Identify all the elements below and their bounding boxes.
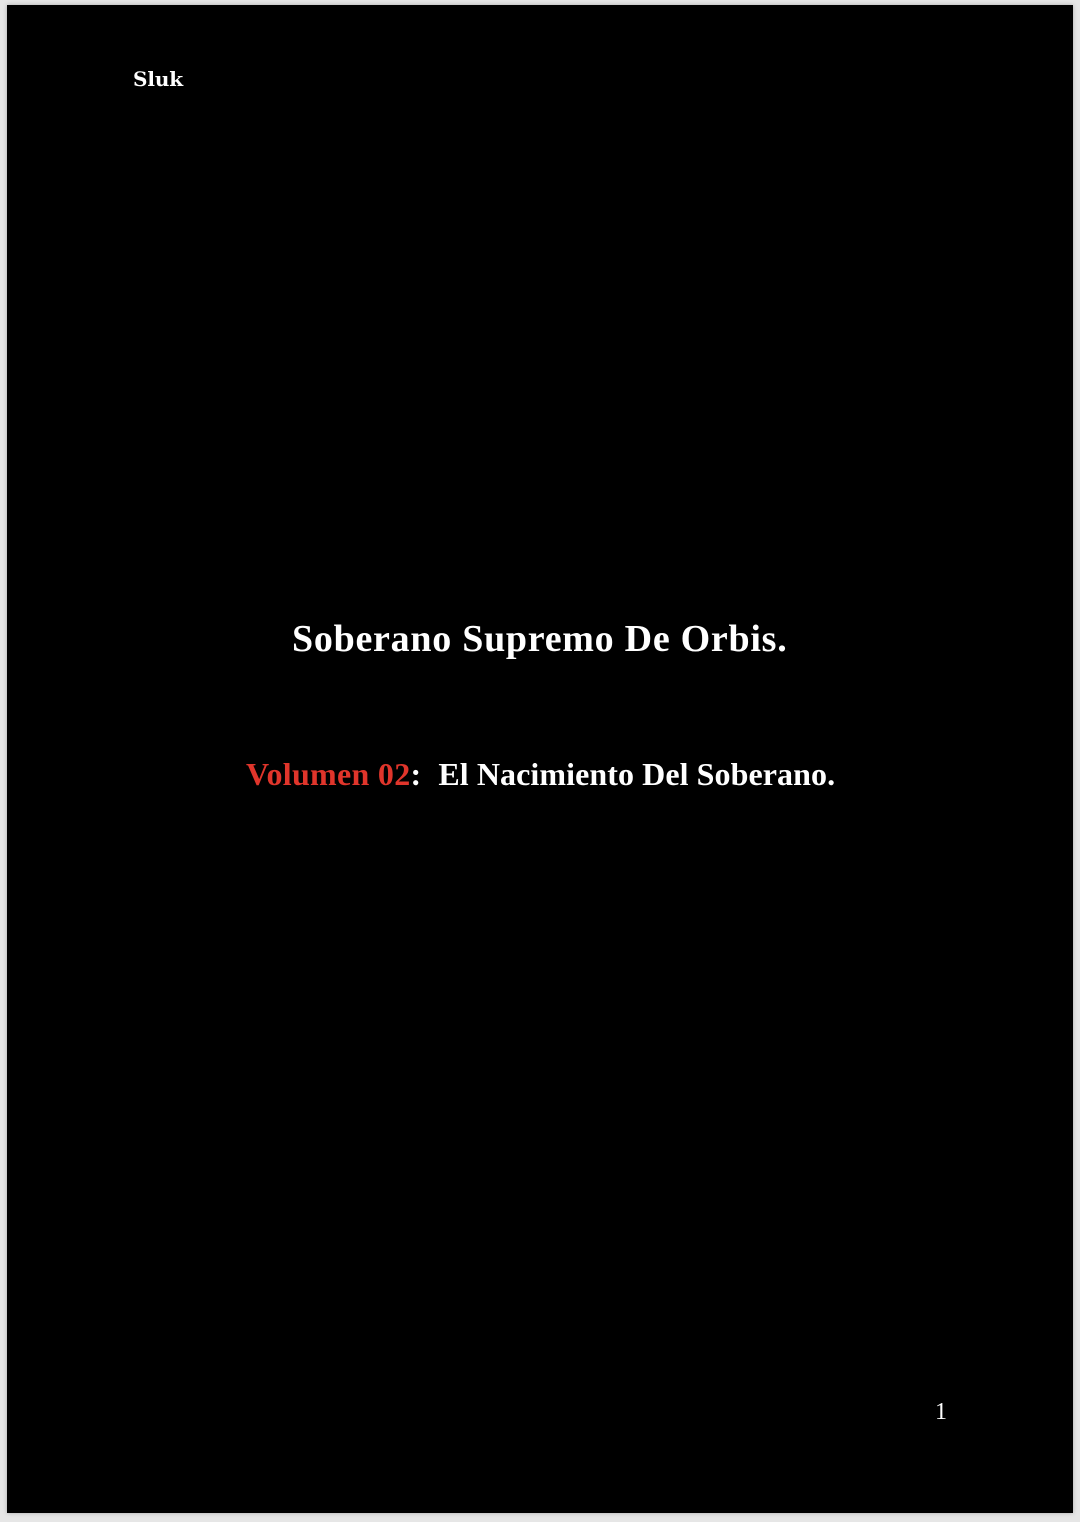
author name: Sluk: [133, 67, 183, 91]
main title: Soberano Supremo De Orbis.: [292, 618, 787, 660]
subtitle: Volumen 02: El Nacimiento Del Soberano.: [246, 756, 835, 792]
page number: 1: [935, 1399, 947, 1425]
